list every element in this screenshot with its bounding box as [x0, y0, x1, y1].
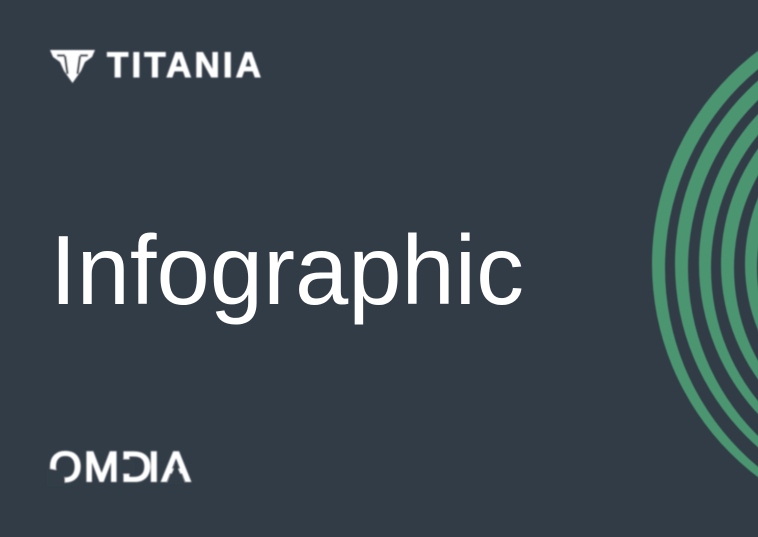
logo wordmark: TITANIA: TITANIA	[107, 46, 261, 85]
Titania logo	[50, 46, 261, 85]
Omdia logo	[47, 443, 190, 490]
logo wordmark: OMDIA: OMDIA	[49, 443, 190, 490]
icon: Titania T mark	[50, 50, 95, 83]
concentric green rings	[652, 0, 758, 531]
title: Infographic	[50, 215, 524, 325]
